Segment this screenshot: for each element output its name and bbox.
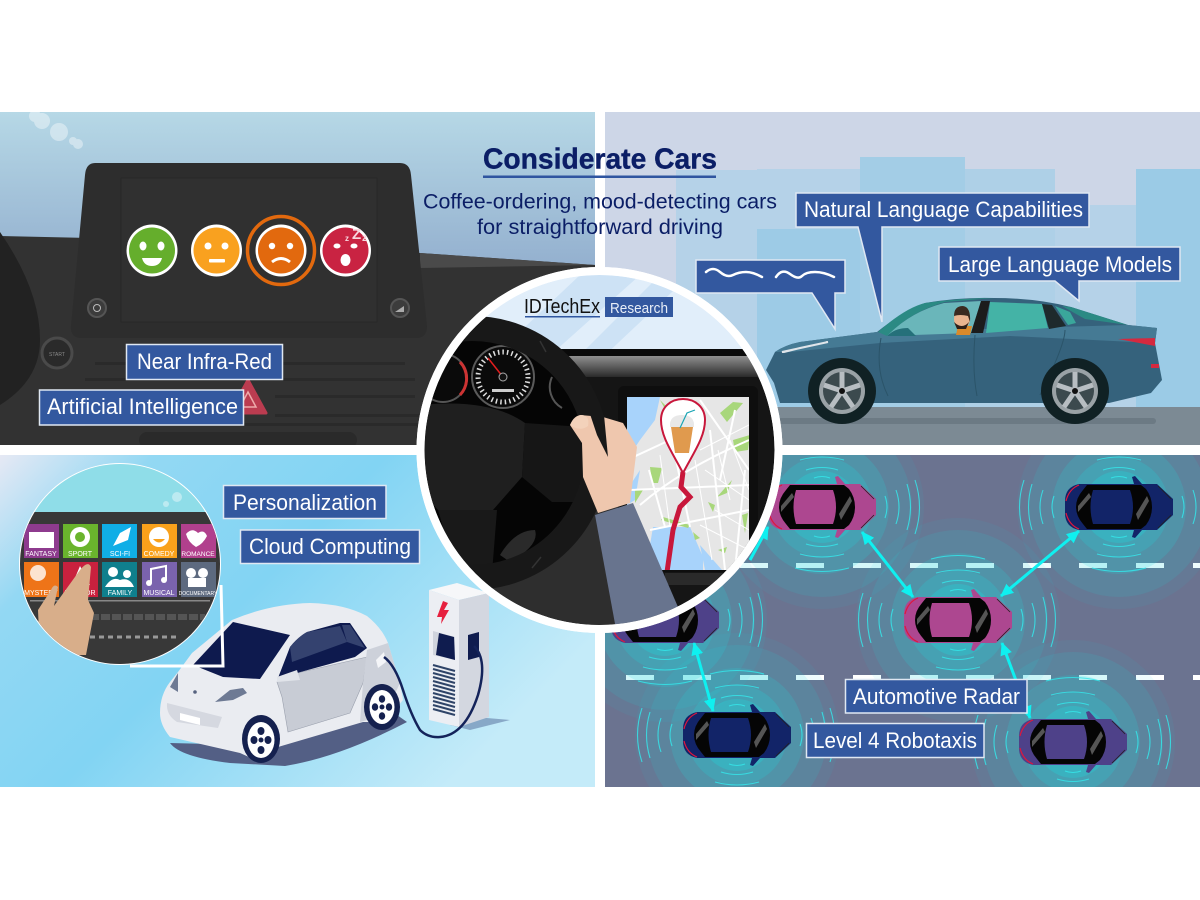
label: natural language capabilities: Natural Language Capabilities — [804, 197, 1083, 222]
label: near infra-red — [126, 344, 282, 380]
steering wheel ring — [348, 328, 596, 578]
map parks — [635, 400, 750, 553]
genre tiles — [24, 524, 218, 597]
vents — [85, 362, 420, 426]
logo: IDTechEx Research: IDTechEx — [524, 296, 600, 318]
panel: robotaxi radar network — [605, 455, 1200, 787]
icon: sleepy face: z — [345, 234, 349, 243]
icon: power button — [88, 299, 106, 317]
wheel interior — [424, 328, 578, 576]
car: pink top — [768, 476, 876, 538]
genre tiles: COMEDY — [144, 551, 175, 558]
title: Considerate Cars — [483, 144, 717, 176]
icon: sun flare — [29, 110, 83, 149]
logo: IDTechEx Research: Research — [610, 300, 668, 317]
label: near infra-red: Near Infra-Red — [137, 349, 272, 374]
navigation screen — [618, 386, 758, 572]
vent buttons — [665, 573, 725, 585]
label: level 4 robotaxis — [806, 724, 984, 758]
door lines — [879, 330, 1065, 396]
windows — [887, 301, 981, 336]
label: large language models — [939, 247, 1180, 301]
label: personalization: Personalization — [233, 490, 377, 515]
radar fields — [605, 455, 1200, 787]
icon: start button — [42, 338, 72, 368]
label: large language models: Large Language Models — [948, 252, 1172, 277]
steering wheel hub — [424, 404, 582, 565]
lane dashes — [626, 563, 1200, 680]
city skyline — [676, 157, 1200, 407]
car: pink centre — [904, 589, 1012, 651]
genre tiles: MYSTERY — [24, 590, 58, 597]
screen bezel — [79, 163, 421, 268]
subtitle: Coffee-ordering, mood-detecting cars — [423, 190, 777, 214]
genre tiles: MUSICAL — [143, 590, 175, 597]
car: violet bottom right — [1019, 711, 1127, 773]
genre tiles: SPORT — [68, 551, 93, 558]
panel: central circle cockpit — [416, 267, 782, 633]
genre tiles: HORROR — [64, 590, 96, 597]
icon: coffee pin — [661, 399, 705, 473]
icon: charging station — [429, 583, 510, 730]
map water — [627, 397, 722, 570]
genre tiles: SCI-FI — [110, 551, 130, 558]
headlight and tail lights — [782, 342, 828, 352]
icon: driver — [954, 306, 972, 335]
inset pointer — [130, 585, 223, 666]
route — [667, 472, 690, 572]
panel: language models car — [605, 112, 1200, 445]
label: cloud computing: Cloud Computing — [249, 534, 411, 559]
car: navy top right — [1065, 476, 1173, 538]
logo: IDTechEx Research — [524, 296, 673, 318]
label: artificial intelligence — [40, 390, 244, 425]
map roads — [627, 400, 749, 570]
label: level 4 robotaxis: Level 4 Robotaxis — [813, 728, 977, 753]
radar arcs — [637, 456, 1196, 786]
genre tiles: FAMILY — [108, 590, 133, 597]
icon: start button: START — [49, 352, 65, 358]
icon: hand — [38, 564, 94, 655]
genre tiles: FANTASY — [25, 551, 57, 558]
subtitle: for straightforward driving — [477, 216, 723, 239]
wheels — [808, 358, 876, 424]
label: natural language capabilities — [796, 193, 1089, 322]
car: navy bottom — [683, 704, 791, 766]
charging cable — [384, 646, 482, 737]
car: violet left — [612, 599, 719, 651]
screen — [121, 178, 377, 322]
icon: sleepy face: z — [362, 233, 367, 244]
icon: steering wheel edge — [0, 232, 40, 405]
label: artificial intelligence: Artificial Intelligence — [47, 394, 238, 419]
label: automotive radar: Automotive Radar — [853, 684, 1020, 709]
icon: electric car — [160, 603, 407, 766]
icon: neutral face — [191, 224, 242, 276]
icon: sleepy face — [320, 224, 371, 276]
car: side view — [766, 298, 1162, 424]
icon: happy face — [126, 224, 178, 276]
genre tiles: DOCUMENTARY — [179, 591, 218, 597]
subtitle — [423, 190, 777, 239]
speech bubble: waves — [696, 260, 845, 329]
icon: hazard triangle — [241, 380, 268, 414]
icon: signal button — [391, 299, 409, 317]
icon: hand on wheel — [570, 415, 637, 513]
panel: personalization EV — [0, 455, 595, 787]
genre tiles: ROMANCE — [181, 551, 215, 558]
icon: sleepy face: Z — [352, 226, 361, 243]
arrows — [694, 527, 1079, 718]
inset: movie genre screen — [19, 463, 221, 667]
road — [605, 407, 1200, 445]
sleeve — [595, 503, 690, 640]
gauges — [419, 346, 562, 408]
panel: dashboard mood detection — [0, 110, 595, 448]
icon: sad face with ring — [248, 216, 314, 284]
